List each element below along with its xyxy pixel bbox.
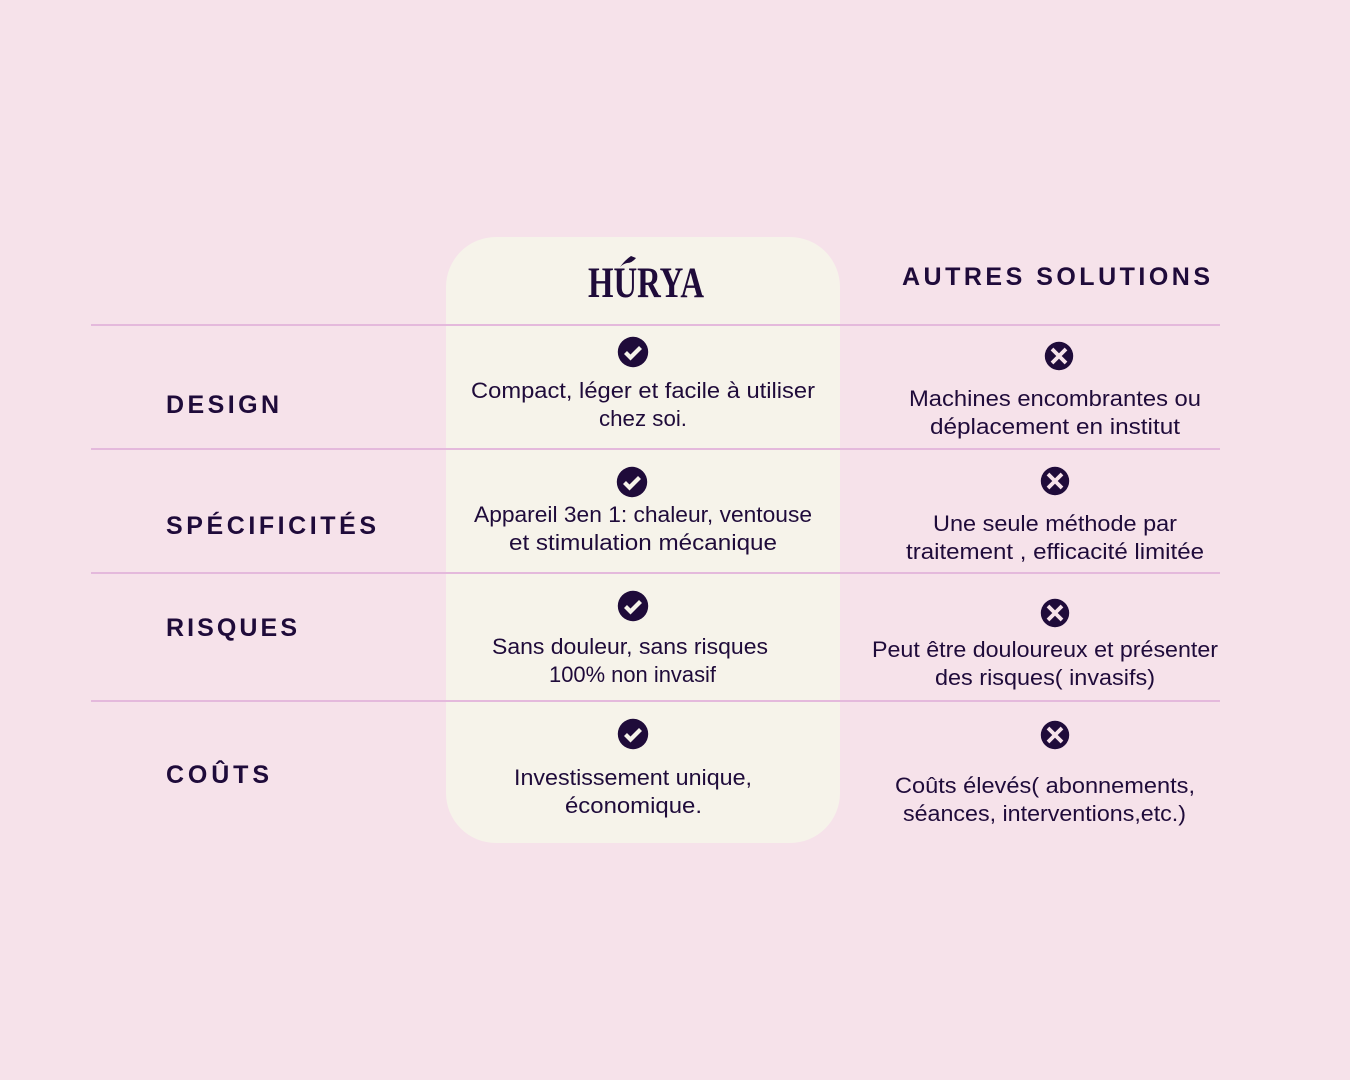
panel: Húrya column: [446, 237, 840, 843]
row label: design: DESIGN: [166, 391, 279, 419]
icon: check risques: [618, 591, 648, 621]
icon: cross risques: [1041, 599, 1069, 627]
row label: risques: RISQUES: [166, 614, 297, 642]
text: Húrya spécificités: [474, 502, 812, 555]
text: autres risques: [872, 637, 1219, 690]
icon: cross coûts: [1041, 721, 1069, 749]
text: autres coûts: Coûts élevés( abonnements,: [895, 773, 1195, 798]
heading: autres solutions: AUTRES SOLUTIONS: [902, 263, 1210, 291]
text: Húrya coûts: [514, 765, 752, 818]
text: autres risques: des risques( invasifs): [935, 665, 1155, 690]
row label: coûts: COÛTS: [166, 759, 269, 789]
text: autres spécificités: Une seule méthode par: [933, 511, 1178, 536]
icon: cross design: [1045, 342, 1073, 370]
text: autres spécificités: [906, 511, 1204, 564]
icon: check spécificités: [617, 467, 647, 497]
text: autres coûts: séances, interventions,etc.): [903, 801, 1186, 826]
text: autres coûts: [895, 773, 1195, 826]
icon: check coûts: [618, 719, 648, 749]
text: autres spécificités: traitement , efficacité limitée: [906, 539, 1204, 564]
text: Húrya risques: Sans douleur, sans risques: [492, 634, 768, 659]
logo: Húrya: HURYA: [588, 260, 704, 307]
icon: cross spécificités: [1041, 467, 1069, 495]
row label: spécificités: SPÉCIFICITÉS: [166, 511, 376, 540]
text: Húrya design: Compact, léger et facile à utiliser: [471, 378, 816, 403]
text: autres design: Machines encombrantes ou: [909, 386, 1201, 411]
icon: check design: [618, 337, 648, 367]
text: Húrya risques: 100% non invasif: [549, 662, 717, 687]
text: Húrya risques: [492, 634, 768, 687]
text: Húrya coûts: Investissement unique,: [514, 765, 752, 790]
text: autres design: [909, 386, 1201, 439]
text: Húrya spécificités: Appareil 3en 1: chaleur, ventouse: [474, 502, 812, 527]
text: Húrya design: [471, 378, 816, 431]
text: Húrya coûts: économique.: [565, 793, 702, 818]
text: autres design: déplacement en institut: [930, 414, 1181, 439]
text: autres risques: Peut être douloureux et présenter: [872, 637, 1219, 662]
text: Húrya spécificités: et stimulation mécanique: [509, 530, 777, 555]
text: Húrya design: chez soi.: [599, 406, 687, 431]
